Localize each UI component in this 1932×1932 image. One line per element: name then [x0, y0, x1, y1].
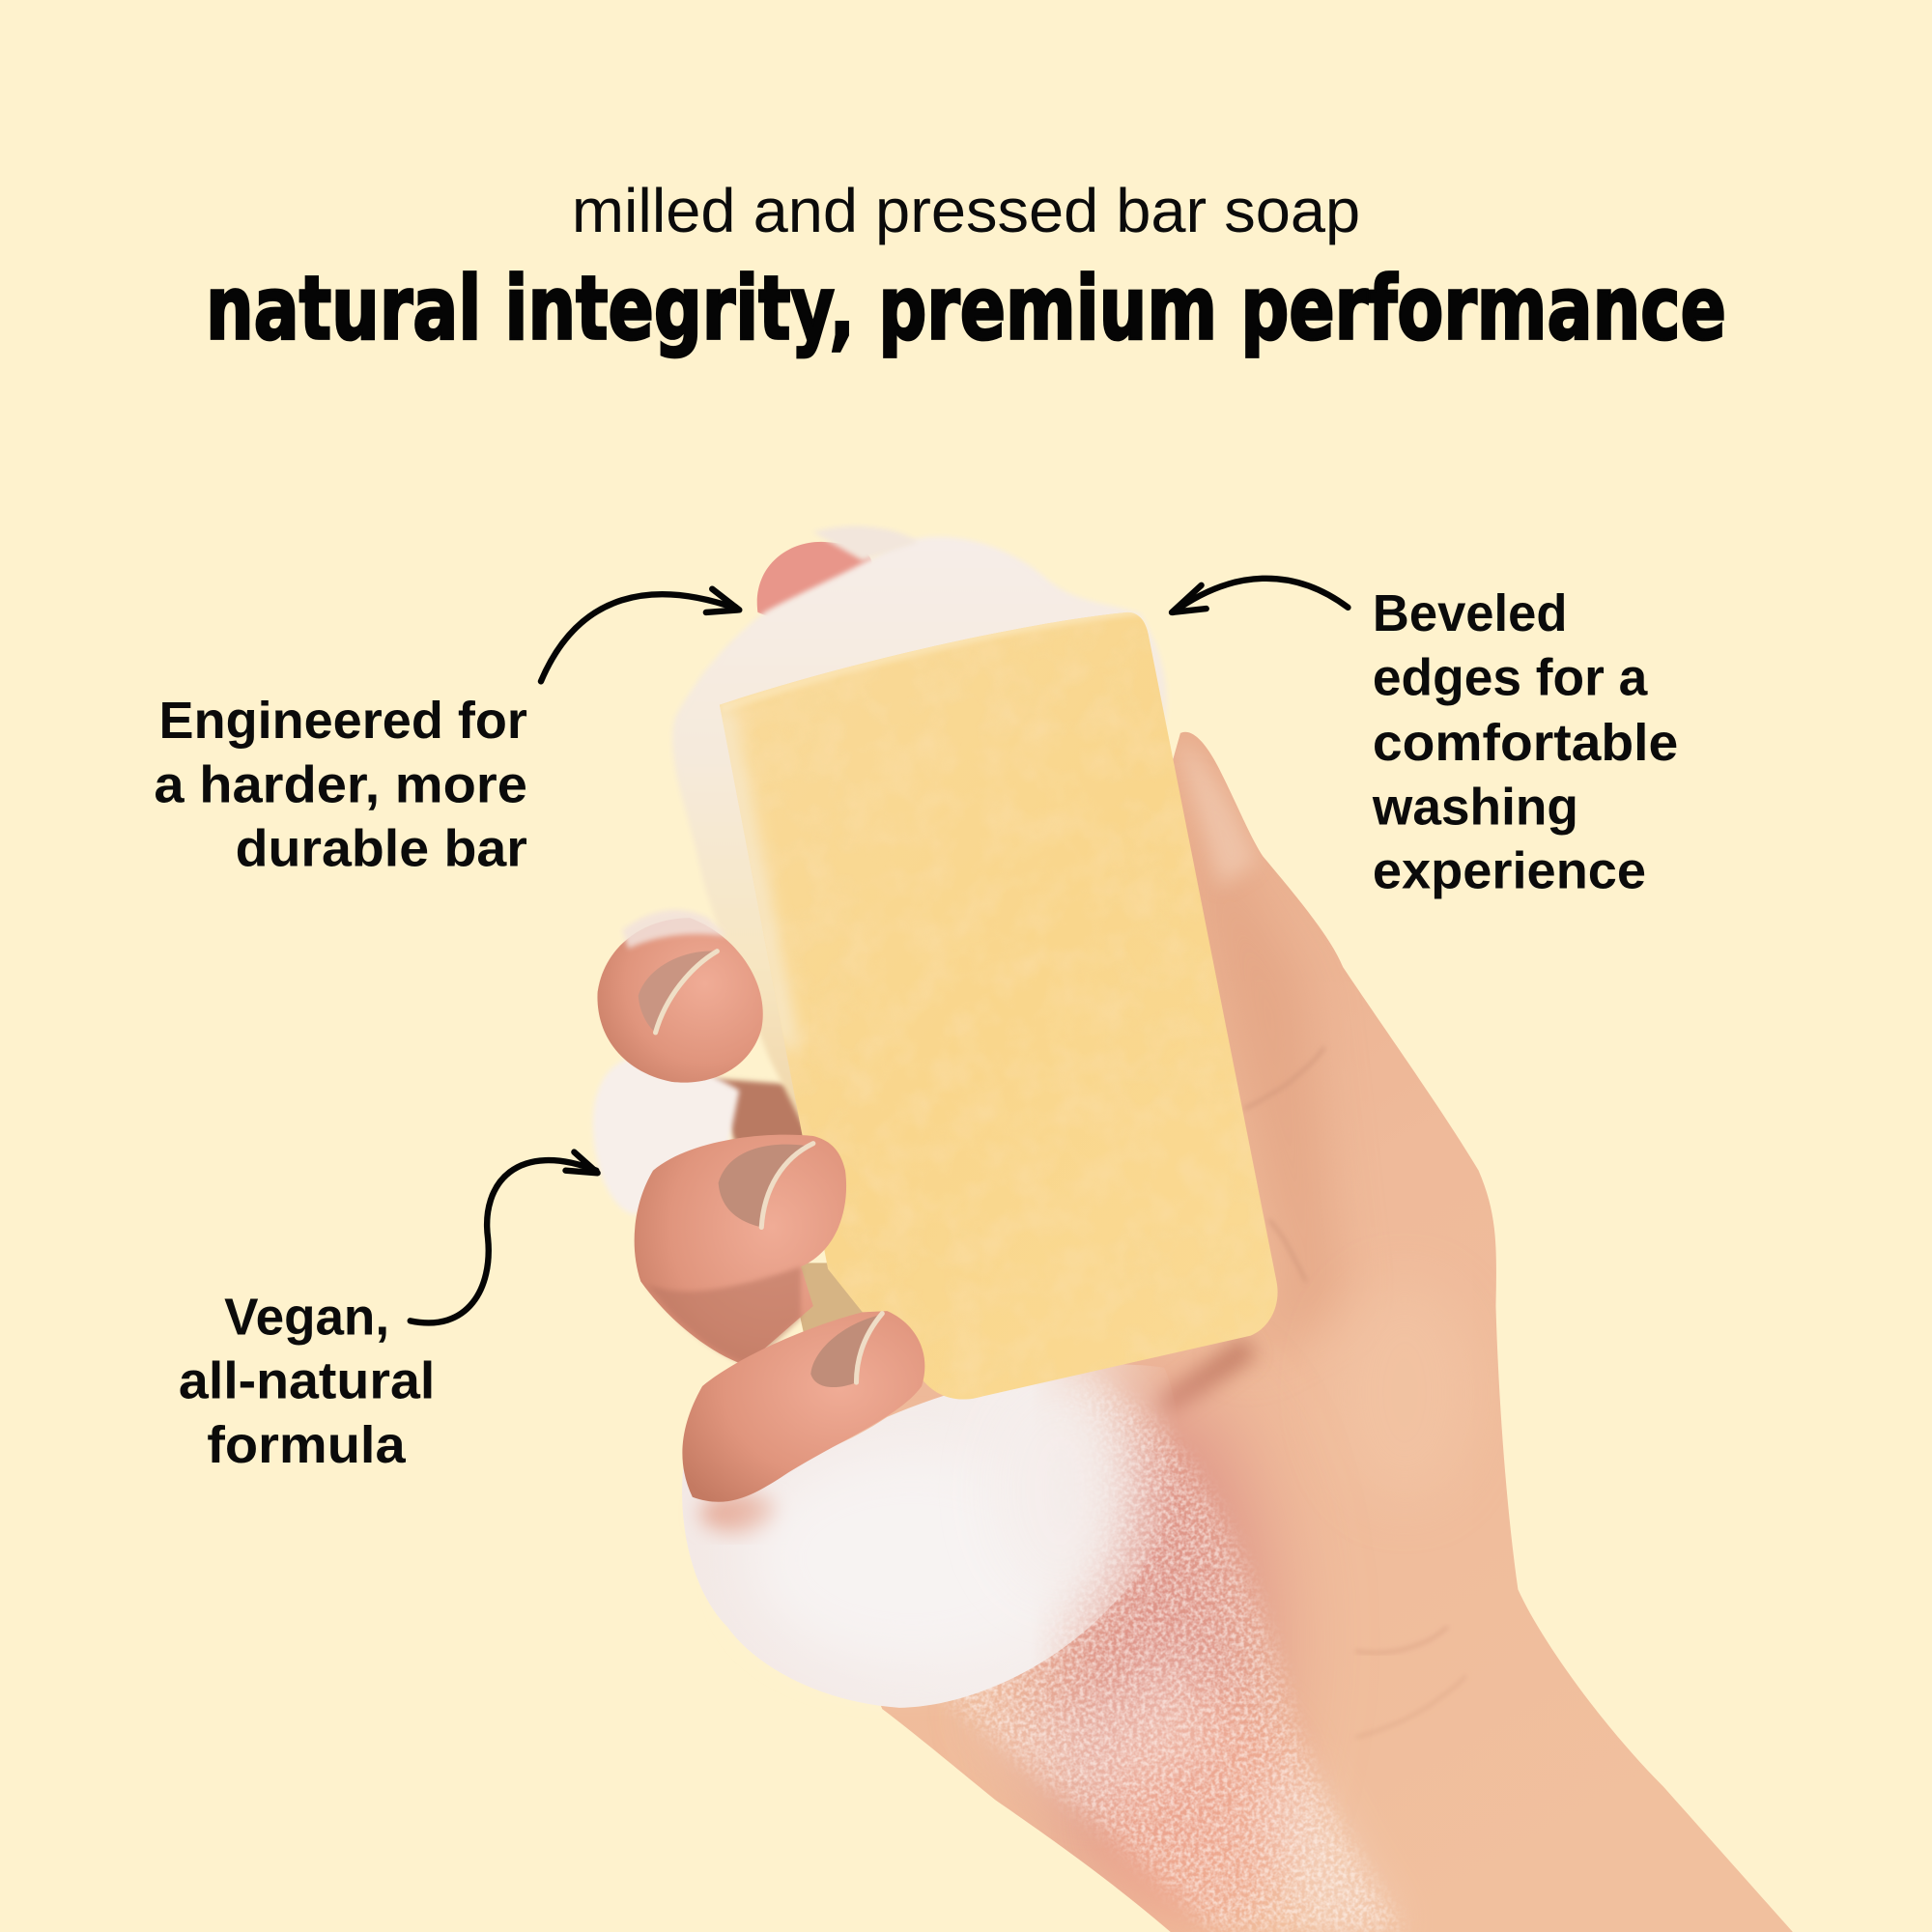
callout: beveled edges: experience: [1373, 843, 1646, 900]
callout: vegan formula: [179, 1289, 435, 1474]
callout: harder, durable bar: [154, 693, 527, 878]
callout: beveled edges: Beveled: [1373, 585, 1567, 642]
soap side face: [788, 1263, 868, 1350]
callout: beveled edges: edges for a: [1373, 649, 1649, 706]
arrow: to soap edge: [1172, 579, 1348, 612]
callout: harder, durable bar: durable bar: [236, 821, 527, 878]
illustration: hand holding lathered soap bar: [593, 526, 1793, 1932]
foam: bottom lather mound: [682, 1364, 1179, 1708]
arrow: to foam: [411, 1152, 598, 1322]
soap bar: [715, 604, 1293, 1417]
foam ball at fingers: [593, 1057, 739, 1215]
heading: subtitle: milled and pressed bar soap: [572, 176, 1360, 245]
callout: beveled edges: [1372, 585, 1678, 900]
callout: harder, durable bar: Engineered for: [159, 693, 527, 750]
skin and shadow between fingers: [708, 1078, 826, 1152]
callout: harder, durable bar: a harder, more: [154, 756, 527, 813]
finger with nail: middle: [635, 1135, 846, 1365]
hand and wrist: [788, 732, 1793, 1932]
finger with nail: lower: [682, 1311, 924, 1502]
callout: beveled edges: comfortable: [1373, 715, 1678, 772]
callout: beveled edges: washing: [1372, 779, 1578, 836]
callout: vegan formula: formula: [207, 1417, 407, 1474]
fingertip behind the foam: [757, 542, 872, 622]
finger with nail: upper: [597, 910, 763, 1083]
callout: vegan formula: all-natural: [179, 1353, 435, 1410]
arrow: to top of soap: [541, 589, 739, 681]
lather on palm: [945, 1374, 1406, 1932]
callout: vegan formula: Vegan,: [224, 1289, 389, 1346]
foam: top and left of soap: [672, 526, 1167, 1146]
